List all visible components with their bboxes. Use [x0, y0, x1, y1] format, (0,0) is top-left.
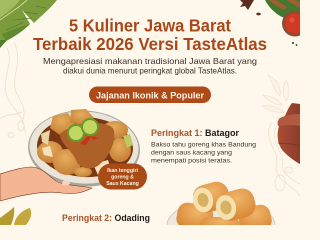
title: [33, 16, 267, 54]
icon: banana leaf top left: [0, 0, 57, 48]
intro text: Mengapresiasi makanan tradisional Jawa Barat yang: [43, 56, 257, 66]
illustration: batagor plate: [26, 108, 142, 189]
text: batagor description: dengan saus kacang yang: [151, 150, 232, 156]
title: 5 Kuliner Jawa Barat: [69, 16, 231, 36]
text: batagor description: menempati posisi teratas.: [151, 158, 232, 164]
section pill: [89, 86, 211, 103]
illustration: odading plate: [167, 179, 275, 240]
callout: ikan tenggiri: Saus Kacang: [106, 181, 139, 187]
icon: spices and sambal top right: [240, 0, 308, 46]
callout: ikan tenggiri: goreng &: [111, 174, 134, 180]
decoration: contour lines right: [269, 122, 300, 196]
heading: peringkat 2: Peringkat 2: Odading: [62, 213, 150, 223]
illustration: clay pot right: [278, 103, 300, 164]
text: batagor description: [151, 142, 256, 164]
decoration: contour lines left: [0, 42, 25, 138]
callout: ikan tenggiri: Ikan tenggiri: [107, 168, 138, 174]
illustration: leaf bottom left: [0, 207, 31, 225]
batagor pieces: [37, 109, 131, 177]
intro text: [43, 56, 257, 76]
callout: ikan tenggiri: [98, 164, 147, 190]
illustration: hand holding plate: [0, 167, 92, 201]
intro text: diakui dunia menurut peringkat global TasteAtlas.: [63, 66, 237, 76]
title: Terbaik 2026 Versi TasteAtlas: [33, 34, 267, 54]
text: batagor description: Bakso tahu goreng khas Bandung: [151, 142, 256, 148]
decoration: leaves right: [263, 75, 293, 119]
section pill: Jajanan Ikonik & Populer: [96, 90, 204, 101]
heading: peringkat 1: Peringkat 1: Batagor: [151, 128, 239, 138]
